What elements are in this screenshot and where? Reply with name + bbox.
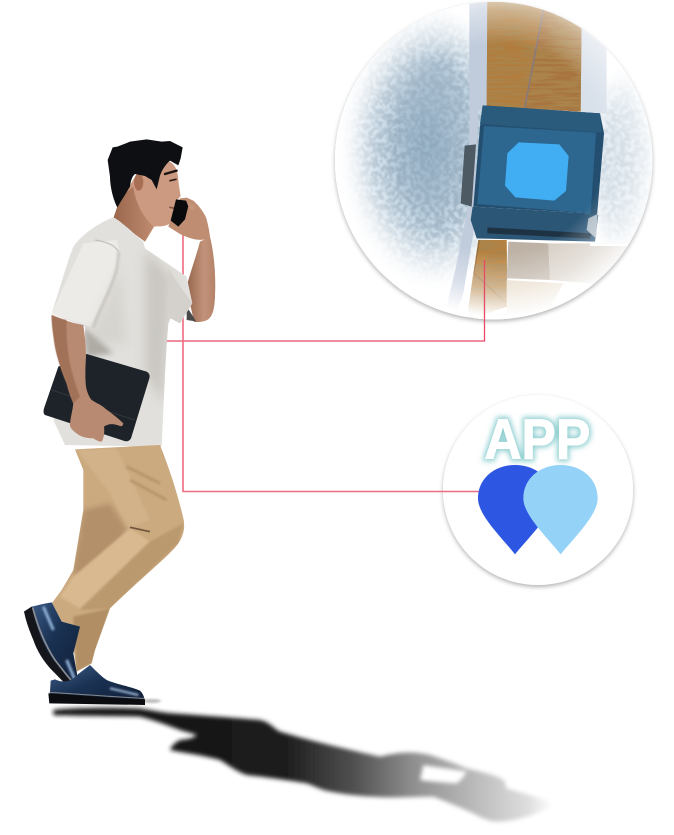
panel: wearable device close-up <box>330 0 660 330</box>
man walking <box>24 139 215 705</box>
trousers and shoes <box>24 440 190 705</box>
left soft strap edge <box>443 0 488 320</box>
neck and face <box>113 162 181 242</box>
phone <box>171 199 188 227</box>
glowing sensor <box>505 142 569 201</box>
right soft strap edge <box>580 28 607 114</box>
device buckle <box>471 105 604 242</box>
near arm and hand <box>52 315 123 442</box>
front shoe <box>49 665 145 703</box>
tablet <box>44 354 150 441</box>
webbing straps <box>507 242 630 320</box>
panel: app circle <box>443 395 633 585</box>
icon: location pins <box>478 465 598 554</box>
t-shirt <box>47 213 197 450</box>
connector line: man to app <box>183 232 480 492</box>
knit fabric <box>347 16 652 278</box>
side tab <box>461 144 476 207</box>
app label: APP <box>484 408 590 471</box>
hair <box>108 139 183 207</box>
wood pattern straps <box>467 0 582 320</box>
app label: APP <box>484 408 590 471</box>
soft edge fade <box>330 0 660 330</box>
icon: dark blue pin <box>478 465 552 554</box>
upper body <box>44 139 215 450</box>
back shoe <box>24 602 80 692</box>
far arm and hand <box>187 237 215 322</box>
connector line: man to device <box>165 260 484 341</box>
icon: light blue pin <box>523 465 598 554</box>
ground shadow <box>53 699 553 822</box>
